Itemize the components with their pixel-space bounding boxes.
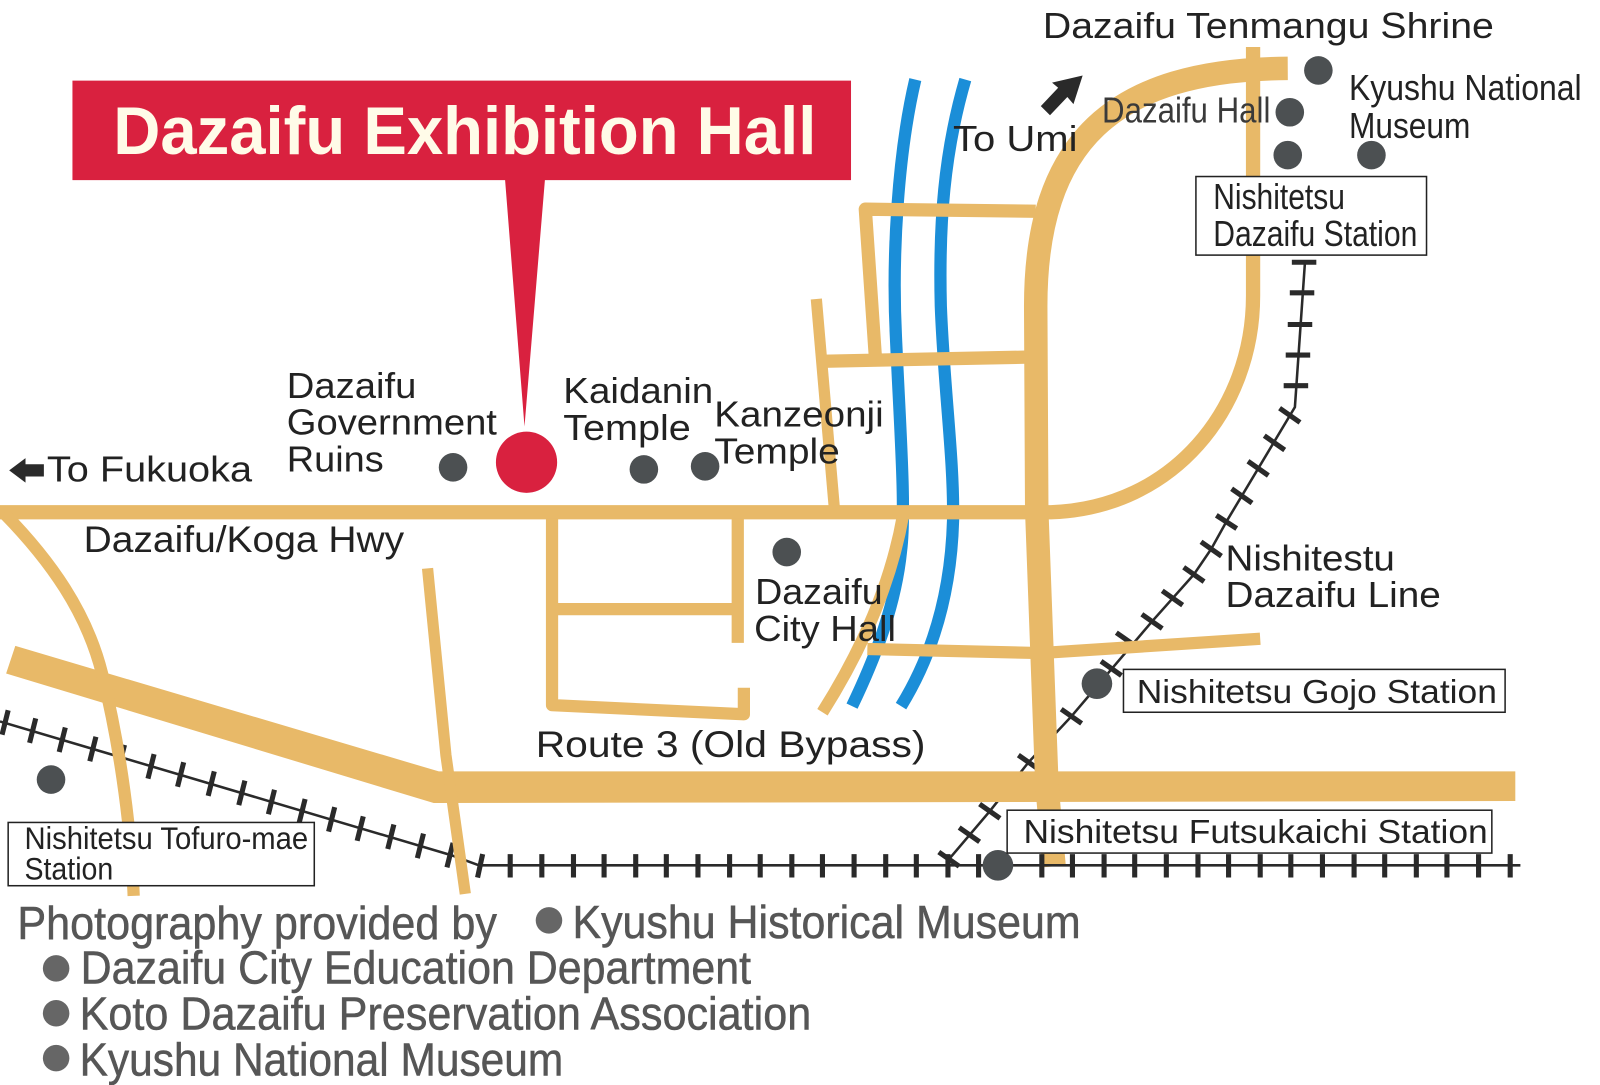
credit: Dazaifu City Education Department: Dazaifu City Education Department [81, 942, 751, 994]
label: Kaidanin Temple: Kaidanin [563, 371, 713, 411]
railway: Nishitetsu Dazaifu Line [939, 260, 1316, 866]
station box: Nishitetsu Tofuro-mae Station: Nishitetsu Tofuro-mae [24, 821, 308, 856]
label: Kanzeonji Temple [714, 395, 884, 471]
label: Dazaifu City Hall: City Hall [754, 609, 896, 649]
icon: arrow to Fukuoka [9, 458, 44, 483]
label: Kanzeonji Temple: Temple [714, 431, 840, 471]
road: northern grid [824, 209, 1036, 361]
label: To Umi: To Umi [953, 119, 1078, 159]
road: central diagonal [428, 568, 465, 894]
credit: Kyushu National Museum: Kyushu National Museum [80, 1034, 563, 1085]
label: Dazaifu Government Ruins: Ruins [287, 439, 384, 479]
road: Dazaifu/Koga Highway and curve to shrine [0, 47, 1253, 512]
icon: arrow to Umi [1041, 76, 1083, 115]
credit: Kyushu Historical Museum: Kyushu Historical Museum [572, 896, 1081, 948]
label: Kyushu National Museum [1349, 68, 1582, 146]
label: Dazaifu/Koga Hwy: Dazaifu/Koga Hwy [84, 519, 405, 560]
label: Nishitestu Dazaifu Line [1226, 538, 1441, 615]
label: Kanzeonji Temple: Kanzeonji [714, 395, 884, 435]
banner: Dazaifu Exhibition Hall [72, 81, 851, 427]
station box: Nishitetsu Tofuro-mae Station: Station [24, 852, 113, 887]
road: main north-south road [1036, 68, 1288, 866]
label: Dazaifu Hall: Dazaifu Hall [1102, 90, 1270, 130]
label: Kaidanin Temple: Temple [563, 408, 691, 448]
label: Dazaifu Tenmangu Shrine: Dazaifu Tenmangu Shrine [1043, 6, 1494, 46]
label: Route 3 (Old Bypass): Route 3 (Old Bypass) [536, 724, 926, 765]
station box: Nishitetsu Gojo Station: Nishitetsu Gojo Station [1137, 674, 1497, 711]
label: Dazaifu Government Ruins [287, 366, 497, 479]
station box: Nishitetsu Dazaifu Station [1196, 177, 1427, 255]
label: Nishitestu Dazaifu Line: Nishitestu [1226, 538, 1395, 578]
road: southern grid [552, 518, 744, 714]
label: Nishitestu Dazaifu Line: Dazaifu Line [1226, 575, 1441, 615]
label: Dazaifu Government Ruins: Government [287, 403, 497, 443]
road: Kanzeonji side road [816, 299, 835, 512]
credit: Koto Dazaifu Preservation Association: Koto Dazaifu Preservation Association [80, 988, 811, 1040]
location dots [37, 56, 1386, 881]
label: To Fukuoka: To Fukuoka [47, 450, 252, 490]
railway: Futsukaichi section [478, 854, 1520, 878]
label: Kaidanin Temple [563, 371, 713, 448]
label: Kyushu National Museum: Museum [1349, 106, 1470, 146]
label: Dazaifu Government Ruins: Dazaifu [287, 366, 416, 406]
credits: photography provided by [17, 896, 1081, 1085]
station box: Nishitetsu Futsukaichi Station: Nishitetsu Futsukaichi Station [1023, 814, 1488, 851]
road: river-side road and Gojo crossing [822, 515, 1260, 712]
location marker: exhibition hall [496, 432, 557, 493]
label: Dazaifu City Hall: Dazaifu [755, 572, 883, 612]
roads [0, 47, 1515, 896]
station box: Nishitetsu Tofuro-mae Station [8, 821, 314, 887]
rivers [852, 80, 965, 706]
railway: Tofuro-mae section [0, 710, 482, 867]
road: Route 3 (Old Bypass) [6, 646, 1515, 803]
title: Dazaifu Exhibition Hall [113, 94, 816, 169]
road: western curve [4, 513, 134, 896]
station box: Nishitetsu Dazaifu Station: Dazaifu Station [1213, 214, 1417, 254]
credits: photography provided by: Photography provided by [17, 897, 497, 949]
label: Dazaifu City Hall [754, 572, 896, 649]
station box: Nishitetsu Dazaifu Station: Nishitetsu [1213, 177, 1345, 217]
